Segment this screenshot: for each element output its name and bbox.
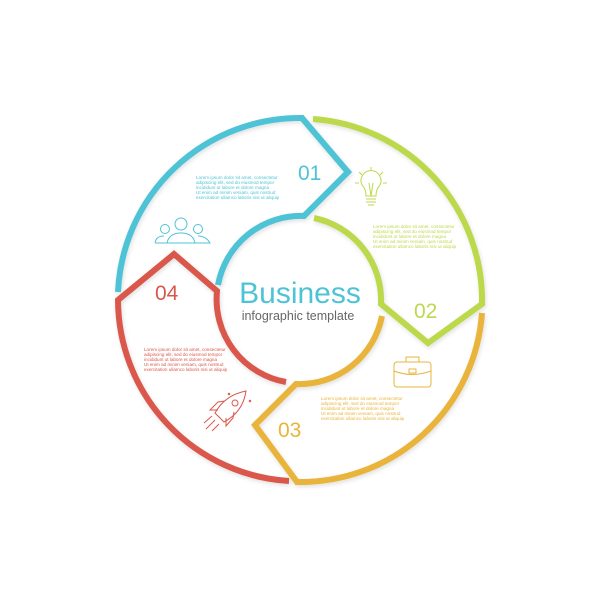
segment 01: blue arrow [118,118,348,292]
text block 02: Ut enim ad minim veniam, quis nostrud [373,239,453,244]
text block 04: Lorem ipsum dolor sit amet, consectetur [144,347,226,352]
icon: rocket [204,391,251,431]
text block 04: adipiscing elit, sed do eiusmod tempor [144,352,223,357]
text block 03: exercitation ullamco laboris nisi ut aliquip [321,416,405,421]
text block 04: incididunt ut labore et dolore magna [144,357,217,362]
text block 04 [144,347,228,372]
text block 01: Ut enim ad minim veniam, quis nostrud [196,190,276,195]
title: infographic template [242,309,354,323]
text block 01: Lorem ipsum dolor sit amet, consectetur [196,175,278,180]
text block 02: Lorem ipsum dolor sit amet, consectetur [373,224,455,229]
text block 04: exercitation ullamco laboris nisi ut aliquip [144,367,228,372]
text block 02: exercitation ullamco laboris nisi ut aliquip [373,244,457,249]
number 01: 01 [298,162,321,185]
text block 03 [321,396,405,421]
text block 02 [373,224,457,249]
segment 04: red arrow [118,254,289,481]
number 02: 02 [414,300,437,323]
text block 04: Ut enim ad minim veniam, quis nostrud [144,362,224,367]
text block 03: Ut enim ad minim veniam, quis nostrud [321,411,401,416]
text block 01: incididunt ut labore et dolore magna [196,185,269,190]
number 03: 03 [278,419,301,442]
text block 02: incididunt ut labore et dolore magna [373,234,446,239]
title: Business [239,277,361,310]
segment 03: yellow arrow [255,313,482,482]
text block 01: adipiscing elit, sed do eiusmod tempor [196,180,275,185]
text block 03: adipiscing elit, sed do eiusmod tempor [321,401,400,406]
number 04: 04 [155,282,179,305]
icon: people [155,218,210,243]
text block 03: Lorem ipsum dolor sit amet, consectetur [321,396,403,401]
text block 01 [196,175,280,200]
text block 01: exercitation ullamco laboris nisi ut aliquip [196,195,280,200]
text block 03: incididunt ut labore et dolore magna [321,406,394,411]
segment 02: green arrow [313,119,482,343]
icon: briefcase [394,357,431,387]
text block 02: adipiscing elit, sed do eiusmod tempor [373,229,452,234]
icon: light bulb [355,167,387,205]
